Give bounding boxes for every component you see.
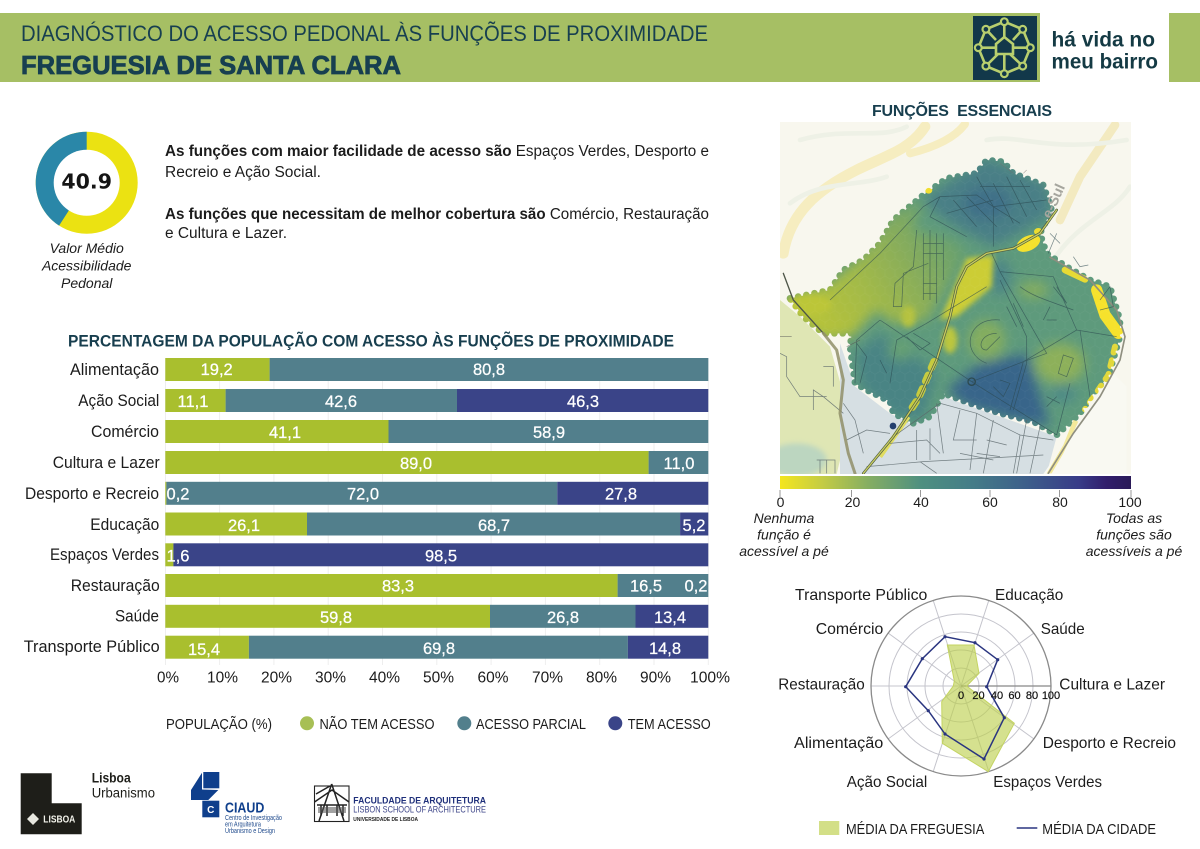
radar: scale labels: 100 — [1042, 690, 1060, 702]
header band — [0, 13, 1200, 82]
icon: neighbourhood emblem — [975, 18, 1034, 77]
map text: road label: e-Sul — [1040, 182, 1069, 221]
x axis labels: 50% — [423, 670, 454, 687]
bar chart legend: ACESSO PARCIAL — [476, 717, 586, 733]
x axis labels: 10% — [207, 670, 238, 687]
logo: Faculdade de Arquitetura — [314, 784, 486, 823]
bar chart: população com acesso — [24, 330, 730, 733]
x axis labels: 40% — [369, 670, 400, 687]
radar: axis labels: Desporto e Recreio — [1043, 735, 1176, 752]
radar legend: MÉDIA DA FREGUESIA — [846, 821, 985, 838]
x axis labels: 100% — [690, 670, 730, 687]
row: Restauração: 83,3 — [382, 578, 414, 596]
row: Desporto e Recreio: 27,8 — [605, 486, 637, 504]
bar chart legend: TEM ACESSO — [628, 717, 711, 733]
row: Transporte Público: 15,4 — [188, 641, 220, 659]
row: Transporte Público — [24, 636, 708, 659]
row: Cultura e Lazer: Cultura e Lazer — [53, 454, 160, 472]
Lisboa Urbanismo text — [92, 771, 155, 801]
radar: scale labels: 20 — [972, 690, 985, 702]
x axis labels: 0% — [157, 670, 179, 687]
row: Restauração: Restauração — [71, 577, 160, 595]
radar: scale labels: 60 — [1008, 690, 1021, 702]
radar: axis labels: Ação Social — [847, 774, 927, 791]
map: outside road network — [780, 353, 1053, 473]
radar: axis labels: Comércio — [816, 621, 883, 638]
donut value: 40.9 — [61, 170, 112, 194]
row: Educação: 68,7 — [478, 517, 510, 535]
scale caption: minimum: Nenhuma — [754, 510, 815, 526]
scale caption: minimum: acessível a pé — [739, 543, 829, 559]
row: Saúde: 26,8 — [547, 609, 579, 627]
row: Comércio — [91, 420, 708, 443]
map: funções essenciais — [767, 122, 1131, 477]
x axis labels: 30% — [315, 670, 346, 687]
row: Espaços Verdes: 1,6 — [167, 548, 189, 566]
row: Saúde — [115, 605, 708, 628]
radar: scale labels — [958, 690, 1060, 702]
scale caption: maximum — [1086, 510, 1182, 559]
x axis labels: 60% — [478, 670, 508, 687]
logo: CIAUD: Centro de Investigação — [225, 813, 282, 822]
radar: scale labels: 80 — [1026, 690, 1038, 702]
radar: scale labels: 0 — [958, 690, 964, 702]
bar chart legend — [166, 716, 711, 733]
radar: axis labels: Transporte Público — [795, 587, 927, 604]
x axis labels: 80% — [586, 670, 617, 687]
row: Espaços Verdes — [50, 543, 708, 566]
logo: CIAUD: C — [207, 805, 214, 816]
row: Cultura e Lazer — [53, 451, 708, 474]
scale labels — [777, 494, 1142, 510]
logo: Faculdade de Arquitetura: LISBON SCHOOL OF ARCHITECTURE — [353, 804, 486, 814]
logo: CIAUD: CIAUD — [225, 800, 264, 817]
summary text: As funções com maior facilidade de acesso são Espaços Verdes, Desporto e — [165, 143, 709, 160]
title line 2: FREGUESIA DE SANTA CLARA — [21, 50, 401, 80]
donut: valor médio — [36, 132, 138, 291]
radar legend — [819, 821, 1156, 838]
row: Educação: Educação — [90, 516, 159, 534]
Lisboa Urbanismo text: Lisboa — [92, 771, 131, 786]
row: Espaços Verdes: Espaços Verdes — [50, 546, 159, 564]
row: Comércio: 41,1 — [269, 424, 301, 442]
row: Ação Social: Ação Social — [78, 392, 159, 410]
scale labels: 60 — [982, 494, 998, 510]
scale caption: minimum — [739, 510, 829, 559]
row: Desporto e Recreio — [25, 482, 708, 505]
radar: axis labels: Espaços Verdes — [993, 774, 1102, 791]
row: Ação Social: 42,6 — [325, 393, 357, 411]
scale labels: 20 — [845, 494, 860, 510]
scale caption: maximum: acessíveis a pé — [1086, 543, 1182, 559]
row: Alimentação — [70, 358, 708, 381]
row: Educação — [90, 512, 708, 536]
row: Restauração: 16,5 — [630, 578, 662, 596]
scale caption: maximum: Todas as — [1106, 510, 1162, 526]
chart heading: PERCENTAGEM DA POPULAÇÃO COM ACESSO ÀS FUNÇÕES DE PROXIMIDADE — [68, 330, 674, 350]
row: Desporto e Recreio: 0,2 — [167, 486, 189, 504]
row: Comércio: 58,9 — [533, 424, 565, 442]
logo: Faculdade de Arquitetura: UNIVERSIDADE DE LISBOA — [353, 817, 418, 823]
logo text: há vida no — [1052, 29, 1155, 52]
row: Desporto e Recreio: 72,0 — [347, 486, 379, 504]
scale labels: 0 — [777, 494, 785, 510]
summary text: e Cultura e Lazer. — [165, 225, 287, 242]
radar legend: MÉDIA DA CIDADE — [1042, 821, 1156, 838]
radar: axis labels: Alimentação — [794, 735, 883, 752]
row: Saúde: Saúde — [115, 608, 159, 626]
row: Alimentação: 19,2 — [201, 361, 233, 379]
logo: CIAUD: em Arquitetura — [225, 820, 261, 829]
row: Saúde: 13,4 — [654, 609, 686, 627]
logo text — [1052, 29, 1158, 73]
summary text — [165, 143, 709, 242]
row: Cultura e Lazer: 11,0 — [664, 455, 694, 473]
row: Restauração — [71, 574, 708, 597]
logo: Lisboa Urbanismo — [21, 771, 155, 834]
logo: CIAUD — [191, 772, 282, 835]
logo text: meu bairro — [1052, 50, 1158, 73]
Lisboa Urbanismo text: Urbanismo — [92, 786, 155, 801]
title line 1: DIAGNÓSTICO DO ACESSO PEDONAL ÀS FUNÇÕES DE PROXIMIDADE — [21, 21, 708, 46]
radar chart — [778, 587, 1176, 838]
row: Alimentação: Alimentação — [70, 361, 159, 379]
row: Alimentação: 80,8 — [473, 361, 505, 379]
row: Comércio: Comércio — [91, 423, 159, 441]
row: Educação: 26,1 — [228, 517, 260, 535]
map: accessibility surface — [786, 157, 1124, 438]
logo: há vida no meu bairro — [973, 16, 1158, 80]
radar: axis labels: Saúde — [1041, 621, 1085, 638]
bar chart legend: POPULAÇÃO (%) — [166, 716, 272, 733]
row: Ação Social: 11,1 — [178, 393, 208, 411]
logo: Lisboa Urbanismo: LISBOA — [43, 814, 76, 826]
map: internal street network — [780, 163, 1117, 435]
summary text: As funções que necessitam de melhor cobertura são Comércio, Restauração — [165, 206, 709, 223]
summary text: Recreio e Ação Social. — [165, 164, 321, 181]
radar: axis labels: Educação — [995, 587, 1063, 604]
colour scale — [739, 476, 1182, 559]
radar: axis labels: Cultura e Lazer — [1059, 676, 1166, 693]
donut caption: Acessibilidade — [41, 258, 132, 274]
logo: Faculdade de Arquitetura: FACULDADE DE ARQUITETURA — [353, 795, 486, 806]
donut caption: Valor Médio — [50, 240, 124, 256]
radar: axis labels: Restauração — [778, 676, 865, 693]
row: Ação Social — [78, 389, 708, 412]
icon: Lisboa crest — [27, 813, 39, 825]
row: Transporte Público: Transporte Público — [24, 638, 160, 656]
x axis labels: 90% — [640, 670, 671, 687]
radar: scale labels: 40 — [991, 690, 1003, 702]
row: Educação: 5,2 — [683, 517, 705, 535]
row: Transporte Público: 69,8 — [423, 640, 455, 658]
x axis labels: 70% — [532, 670, 563, 687]
bar chart legend: NÃO TEM ACESSO — [320, 716, 434, 733]
row: Ação Social: 46,3 — [567, 393, 599, 411]
row: Cultura e Lazer: 89,0 — [400, 455, 432, 473]
radar: média da freguesia — [942, 645, 1014, 772]
donut caption — [41, 240, 132, 291]
row: Saúde: 59,8 — [320, 609, 352, 627]
row: Restauração: 0,2 — [685, 578, 707, 596]
row: Transporte Público: 14,8 — [649, 640, 681, 658]
scale caption: maximum: funções são — [1096, 526, 1172, 542]
logo: CIAUD: Urbanismo e Design — [225, 826, 275, 835]
map heading: FUNÇÕES ESSENCIAIS — [872, 100, 1052, 120]
scale labels: 100 — [1118, 494, 1142, 510]
icon: faculty compass building — [314, 784, 349, 822]
scale caption: minimum: função é — [757, 526, 811, 542]
radar: axis labels — [778, 587, 1176, 791]
x axis labels — [157, 670, 730, 687]
map: perimeter roads — [783, 210, 1125, 473]
scale labels: 40 — [913, 494, 929, 510]
x axis labels: 20% — [261, 670, 292, 687]
radar: média da cidade — [904, 635, 1006, 761]
scale labels: 80 — [1052, 494, 1068, 510]
row: Desporto e Recreio: Desporto e Recreio — [25, 485, 159, 503]
row: Espaços Verdes: 98,5 — [425, 548, 457, 566]
donut caption: Pedonal — [61, 275, 113, 291]
